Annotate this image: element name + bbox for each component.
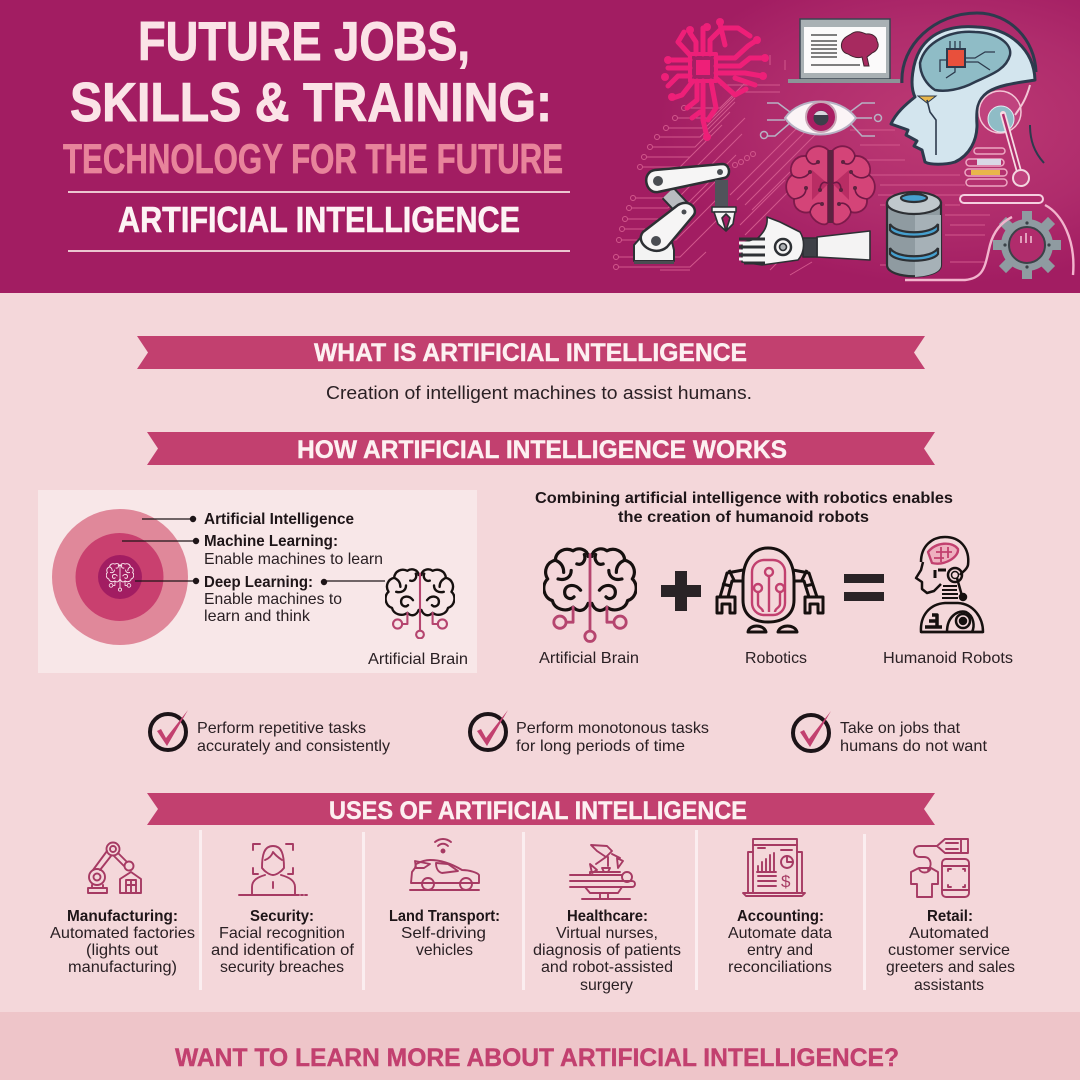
- label: machine learning: [204, 533, 383, 568]
- label: artificial intelligence: Artificial Intelligence: [204, 511, 354, 528]
- benefit: unwanted jobs: [793, 711, 988, 755]
- use: retail: customer service: [888, 942, 1010, 959]
- laptop with brain: [788, 19, 900, 83]
- ribbon heading: uses of AI: USES OF ARTIFICIAL INTELLIGENCE: [329, 797, 747, 825]
- use: security: Facial recognition: [219, 925, 345, 942]
- use: security: [211, 844, 355, 976]
- gear: [998, 216, 1056, 274]
- illustration: AI collage: [614, 13, 1073, 280]
- footer call to action: WANT TO LEARN MORE ABOUT ARTIFICIAL INTELLIGENCE?: [175, 1044, 899, 1072]
- eye: [760, 102, 882, 138]
- robot arm: [634, 164, 736, 264]
- combining heading: the creation of humanoid robots: [618, 509, 869, 526]
- label: deep learning: learn and think: [204, 608, 311, 625]
- label: deep learning: Deep Learning:: [204, 574, 313, 591]
- label: machine learning: Machine Learning:: [204, 533, 338, 550]
- database stack: [887, 192, 941, 277]
- column dividers: [199, 830, 866, 990]
- ribbon heading: uses of AI: [147, 793, 935, 825]
- label: artificial brain: Artificial Brain: [368, 651, 468, 668]
- icon: check: [150, 710, 188, 750]
- use: accounting: reconciliations: [728, 959, 832, 976]
- use: land transport: Land Transport:: [389, 908, 500, 925]
- panel: AI concentric diagram: [38, 490, 477, 673]
- use: accounting: entry and: [747, 942, 813, 959]
- icon: laptop report: [743, 839, 805, 896]
- use: healthcare: and robot-assisted: [541, 959, 673, 976]
- benefit: repetitive tasks: accurately and consistently: [197, 738, 390, 755]
- icon: artificial brain: [386, 569, 454, 638]
- use: accounting: Accounting:: [737, 908, 824, 925]
- icon: check: [793, 711, 831, 751]
- benefit: unwanted jobs: humans do not want: [840, 738, 988, 755]
- footer call to action: [0, 1012, 1080, 1080]
- label: machine learning: Enable machines to learn: [204, 551, 383, 568]
- ribbon heading: how AI works: HOW ARTIFICIAL INTELLIGENCE WORKS: [297, 436, 787, 464]
- ribbon heading: how AI works: [147, 432, 935, 465]
- use: healthcare: surgery: [580, 977, 633, 994]
- title: FUTURE JOBS,: [138, 10, 470, 72]
- use: manufacturing: Manufacturing:: [67, 908, 178, 925]
- benefit: unwanted jobs: Take on jobs that: [840, 720, 961, 737]
- use: healthcare: Virtual nurses,: [556, 925, 658, 942]
- icon: check: [470, 710, 508, 750]
- pink circuit brain: [661, 18, 769, 141]
- use: manufacturing: Automated factories: [50, 925, 195, 942]
- use: retail: Retail:: [927, 908, 973, 925]
- title: [70, 10, 552, 133]
- label: artificial brain: Artificial Brain: [539, 650, 639, 667]
- label: humanoid robots: Humanoid Robots: [883, 650, 1013, 667]
- combining heading: [535, 490, 953, 526]
- use: security: security breaches: [220, 959, 344, 976]
- use: land transport: vehicles: [416, 942, 473, 959]
- circuit background lines: [614, 55, 990, 275]
- use: manufacturing: manufacturing): [68, 959, 177, 976]
- use: retail: assistants: [914, 977, 984, 994]
- icon: connected car: [410, 839, 479, 890]
- benefit: repetitive tasks: [150, 710, 390, 755]
- use: healthcare: [533, 845, 681, 994]
- benefit: monotonous tasks: for long periods of time: [516, 738, 685, 755]
- concentric circles: [52, 509, 188, 645]
- icon: equals: [844, 574, 884, 601]
- use: manufacturing: (lights out: [86, 942, 159, 959]
- icon: robot arm factory: [88, 842, 141, 893]
- use: retail: Automated: [909, 925, 989, 942]
- robot head: [891, 13, 1036, 164]
- use: security: and identification of: [211, 942, 355, 959]
- icon: humanoid robot: [916, 537, 983, 632]
- use: accounting: [728, 839, 832, 976]
- title: SKILLS & TRAINING:: [70, 71, 552, 133]
- use: security: Security:: [250, 908, 314, 925]
- use: healthcare: diagnosis of patients: [533, 942, 681, 959]
- leader lines: [122, 516, 385, 585]
- use: retail: greeters and sales: [886, 959, 1015, 976]
- subtitle: TECHNOLOGY FOR THE FUTURE: [63, 135, 563, 182]
- ribbon heading: what is AI: WHAT IS ARTIFICIAL INTELLIGENCE: [314, 339, 747, 367]
- benefit: monotonous tasks: [470, 710, 709, 755]
- label: robotics: Robotics: [745, 650, 807, 667]
- robot hand: [739, 217, 870, 265]
- label: deep learning: Enable machines to: [204, 591, 342, 608]
- central brain: [786, 146, 875, 224]
- use: retail: [886, 839, 1015, 994]
- icon: small brain: [106, 564, 134, 591]
- use: accounting: Automate data: [728, 925, 832, 942]
- icon: facial recognition: [239, 844, 307, 895]
- combining heading: Combining artificial intelligence with robotics enables: [535, 490, 953, 507]
- benefit: repetitive tasks: Perform repetitive tasks: [197, 720, 366, 737]
- icon: robotic surgery: [570, 845, 635, 899]
- use: manufacturing: [50, 842, 195, 976]
- label: dollar sign: $: [781, 872, 791, 891]
- ear disc and rod: [979, 85, 1044, 186]
- topic heading with rules: ARTIFICIAL INTELLIGENCE: [118, 199, 520, 240]
- icon: artificial brain large: [544, 549, 636, 641]
- label: deep learning: [204, 574, 342, 625]
- benefit: monotonous tasks: Perform monotonous tasks: [516, 720, 709, 737]
- icon: retail tag, shirt and phone: [911, 839, 969, 897]
- use: land transport: [389, 839, 500, 959]
- header banner: [0, 0, 1080, 293]
- robot body outline: [905, 205, 1073, 280]
- ribbon heading: what is AI: [137, 336, 925, 369]
- memory bars: [960, 148, 1043, 203]
- icon: robot: [717, 548, 823, 632]
- use: healthcare: Healthcare:: [567, 908, 648, 925]
- use: land transport: Self-driving: [401, 925, 486, 942]
- definition text: Creation of intelligent machines to assist humans.: [326, 383, 752, 403]
- icon: plus: [661, 571, 701, 611]
